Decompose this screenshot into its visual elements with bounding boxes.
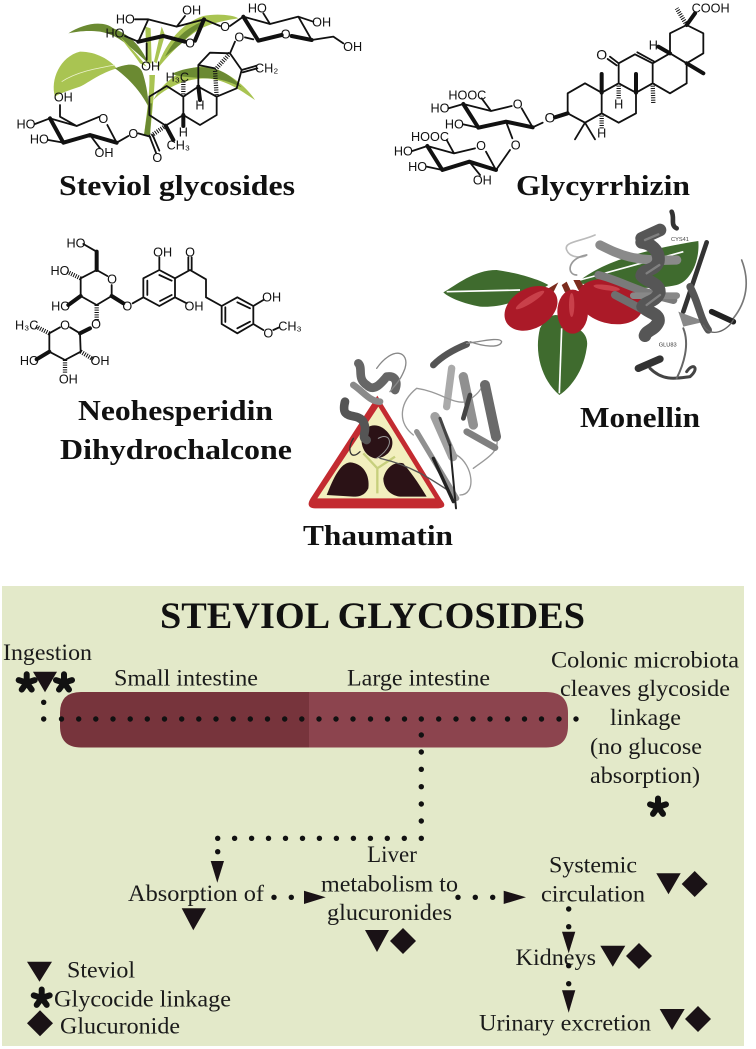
icon: warning triangle [309, 396, 444, 508]
illustration: thaumatin warning triangle and ribbon [309, 340, 502, 508]
text: Systemic circulation: circulation [541, 882, 646, 907]
text: Liver metabolism to glucuronides: Liver [367, 842, 417, 867]
text: Liver metabolism to glucuronides: metabolism to [321, 872, 458, 897]
molecule: steviol glycoside bonds: O [185, 37, 195, 51]
molecule: glycyrrhizin: H [597, 127, 606, 141]
molecule: glycyrrhizin: HOOC [411, 130, 449, 144]
molecule: steviol glycoside bonds: CH₃ [167, 138, 190, 152]
icon: serendipity berry leaves [443, 241, 699, 395]
icon: red berries [496, 272, 648, 340]
molecule: neohesperidin dihydrochalcone: HO [20, 354, 39, 368]
molecule: neohesperidin dihydrochalcone: HO [67, 237, 86, 251]
panel: steviol glycosides metabolism [2, 586, 744, 1046]
chart: thaumatin ribbon structure [344, 340, 502, 508]
molecule: glycyrrhizin: HO [408, 160, 427, 174]
molecule: glycyrrhizin: O [596, 46, 607, 62]
text: colonic microbiota note [551, 647, 739, 788]
molecule: steviol glycoside bonds: CH₂ [255, 62, 278, 76]
molecule: steviol glycoside bonds: HO [106, 27, 125, 41]
molecule: glycyrrhizin [394, 2, 730, 187]
molecule: neohesperidin dihydrochalcone: O [263, 327, 273, 341]
text: Urinary excretion [479, 1006, 711, 1035]
text: Liver metabolism to glucuronides [321, 842, 458, 954]
molecule: glycyrrhizin: COOH [692, 2, 730, 16]
molecule: neohesperidin dihydrochalcone: CH₃ [278, 319, 302, 333]
legend: Steviol [67, 958, 135, 983]
molecule: neohesperidin dihydrochalcone: O [91, 318, 101, 332]
molecule: steviol glycoside bonds: O [234, 31, 244, 45]
legend: Glycocide linkage [54, 987, 231, 1012]
molecule: steviol glycoside bonds: OH [312, 15, 331, 29]
molecule: steviol glycoside bonds: O [220, 20, 230, 34]
heading: Neohesperidin Dihydrochalcone [60, 395, 292, 466]
text: Absorption of steviol [128, 881, 264, 930]
heading: STEVIOL GLYCOSIDES: STEVIOL GLYCOSIDES [160, 596, 585, 637]
heading: Neohesperidin Dihydrochalcone: Neohesperidin [78, 395, 273, 427]
molecule: neohesperidin dihydrochalcone: O [107, 273, 117, 287]
intestine tube [60, 692, 568, 748]
text: Absorption of steviol: Absorption of [128, 881, 264, 906]
molecule: steviol glycoside bonds: HO [116, 13, 135, 27]
molecule: glycyrrhizin: H [614, 97, 623, 111]
legend [27, 958, 231, 1038]
molecule: glycyrrhizin: H [649, 38, 658, 52]
text: Liver metabolism to glucuronides: glucuronides [327, 900, 452, 925]
molecule: glycyrrhizin: O [513, 98, 523, 112]
text: Systemic circulation: Systemic [549, 852, 637, 877]
molecule: steviol glycoside bonds: HO [17, 117, 36, 131]
text: colonic microbiota note: cleaves glycoside [560, 676, 730, 701]
legend: Glucuronide [60, 1013, 180, 1038]
molecule: neohesperidin dihydrochalcone: HO [51, 264, 70, 278]
panel: steviol glycosides structure [17, 2, 362, 165]
molecule: neohesperidin dihydrochalcone [15, 237, 302, 387]
molecule: glycyrrhizin: HOOC [448, 88, 486, 102]
text: colonic microbiota note: (no glucose [590, 734, 702, 759]
arrow: kidneys to urinary excretion [562, 963, 575, 1013]
molecule: glycyrrhizin: HO [445, 118, 464, 132]
molecule: neohesperidin dihydrochalcone: H₃C [15, 318, 38, 332]
heading: Monellin: Monellin [580, 402, 700, 434]
molecule: neohesperidin dihydrochalcone: O [60, 318, 70, 332]
label: Large intestine: Large intestine [347, 666, 490, 691]
arrow: liver to circulation [455, 891, 526, 904]
chart: monellin ribbon structure [566, 212, 746, 378]
molecule: steviol glycoside bonds: H [195, 99, 205, 113]
molecule: steviol glycoside bonds: HO [248, 2, 267, 16]
molecule: steviol glycoside bonds: OH [141, 60, 160, 74]
heading: Thaumatin: Thaumatin [303, 520, 453, 552]
icon: stevia plant leaves [54, 15, 255, 135]
molecule: glycyrrhizin: HO [431, 102, 450, 116]
text: colonic microbiota note: absorption) [590, 763, 700, 788]
text: Kidneys: Kidneys [516, 945, 596, 970]
molecule: glycyrrhizin: O [511, 138, 521, 152]
molecule: steviol glycoside bonds: OH [182, 4, 201, 18]
molecule: steviol glycoside bonds: H [179, 125, 188, 139]
molecule: steviol glycoside bonds: HO [30, 133, 49, 147]
molecule: neohesperidin dihydrochalcone: OH [59, 373, 78, 387]
text: colonic microbiota note: linkage [610, 705, 681, 730]
molecule: neohesperidin dihydrochalcone: HO [51, 299, 70, 313]
molecule: glycyrrhizin: HO [394, 144, 413, 158]
molecule: steviol glycoside bonds: OH [343, 40, 362, 54]
molecule: neohesperidin dihydrochalcone: OH [91, 354, 109, 368]
arrow: absorption to liver [271, 891, 326, 904]
heading: Steviol glycosides: Steviol glycosides [59, 170, 295, 202]
icon group: ingested steviol glycoside [19, 672, 72, 692]
illustration: monellin berries and protein ribbon [443, 212, 746, 395]
molecule: glycyrrhizin: OH [473, 173, 492, 187]
chart: monellin ribbon structure: GLU83 [659, 343, 677, 349]
arrow: circulation to kidneys [562, 906, 575, 953]
arrow: dotted path through intestine to absorption [41, 700, 579, 883]
molecule: neohesperidin dihydrochalcone: OH [262, 291, 281, 305]
molecule: steviol glycoside bonds [17, 2, 362, 165]
text: Kidneys [516, 943, 652, 970]
text: Systemic circulation [541, 852, 708, 907]
chart: monellin ribbon structure: CYS41 [671, 237, 689, 243]
molecule: neohesperidin dihydrochalcone: O [122, 299, 132, 313]
molecule: neohesperidin dihydrochalcone: OH [153, 246, 172, 260]
molecule: steviol glycoside bonds: O [152, 151, 162, 165]
molecule: steviol glycoside bonds: OH [54, 90, 73, 104]
label: Small intestine: Small intestine [114, 666, 258, 691]
molecule: steviol glycoside bonds: O [281, 27, 291, 41]
molecule: steviol glycoside bonds: O [98, 112, 108, 126]
molecule: steviol glycoside bonds: H₃C [166, 71, 189, 85]
molecule: neohesperidin dihydrochalcone: OH [185, 299, 203, 313]
label: Ingestion: Ingestion [3, 640, 93, 665]
heading: Glycyrrhizin: Glycyrrhizin [516, 170, 690, 202]
molecule: glycyrrhizin: O [545, 110, 556, 126]
text: Urinary excretion: Urinary excretion [479, 1010, 652, 1035]
molecule: steviol glycoside bonds: O [128, 127, 138, 141]
molecule: neohesperidin dihydrochalcone: O [185, 246, 195, 260]
molecule: steviol glycoside bonds: OH [95, 146, 113, 160]
text: colonic microbiota note: Colonic microbiota [551, 647, 739, 672]
molecule: glycyrrhizin: O [476, 139, 486, 153]
heading: Neohesperidin Dihydrochalcone: Dihydrochalcone [60, 434, 292, 466]
icon: glycoside linkage asterisk [650, 798, 666, 814]
